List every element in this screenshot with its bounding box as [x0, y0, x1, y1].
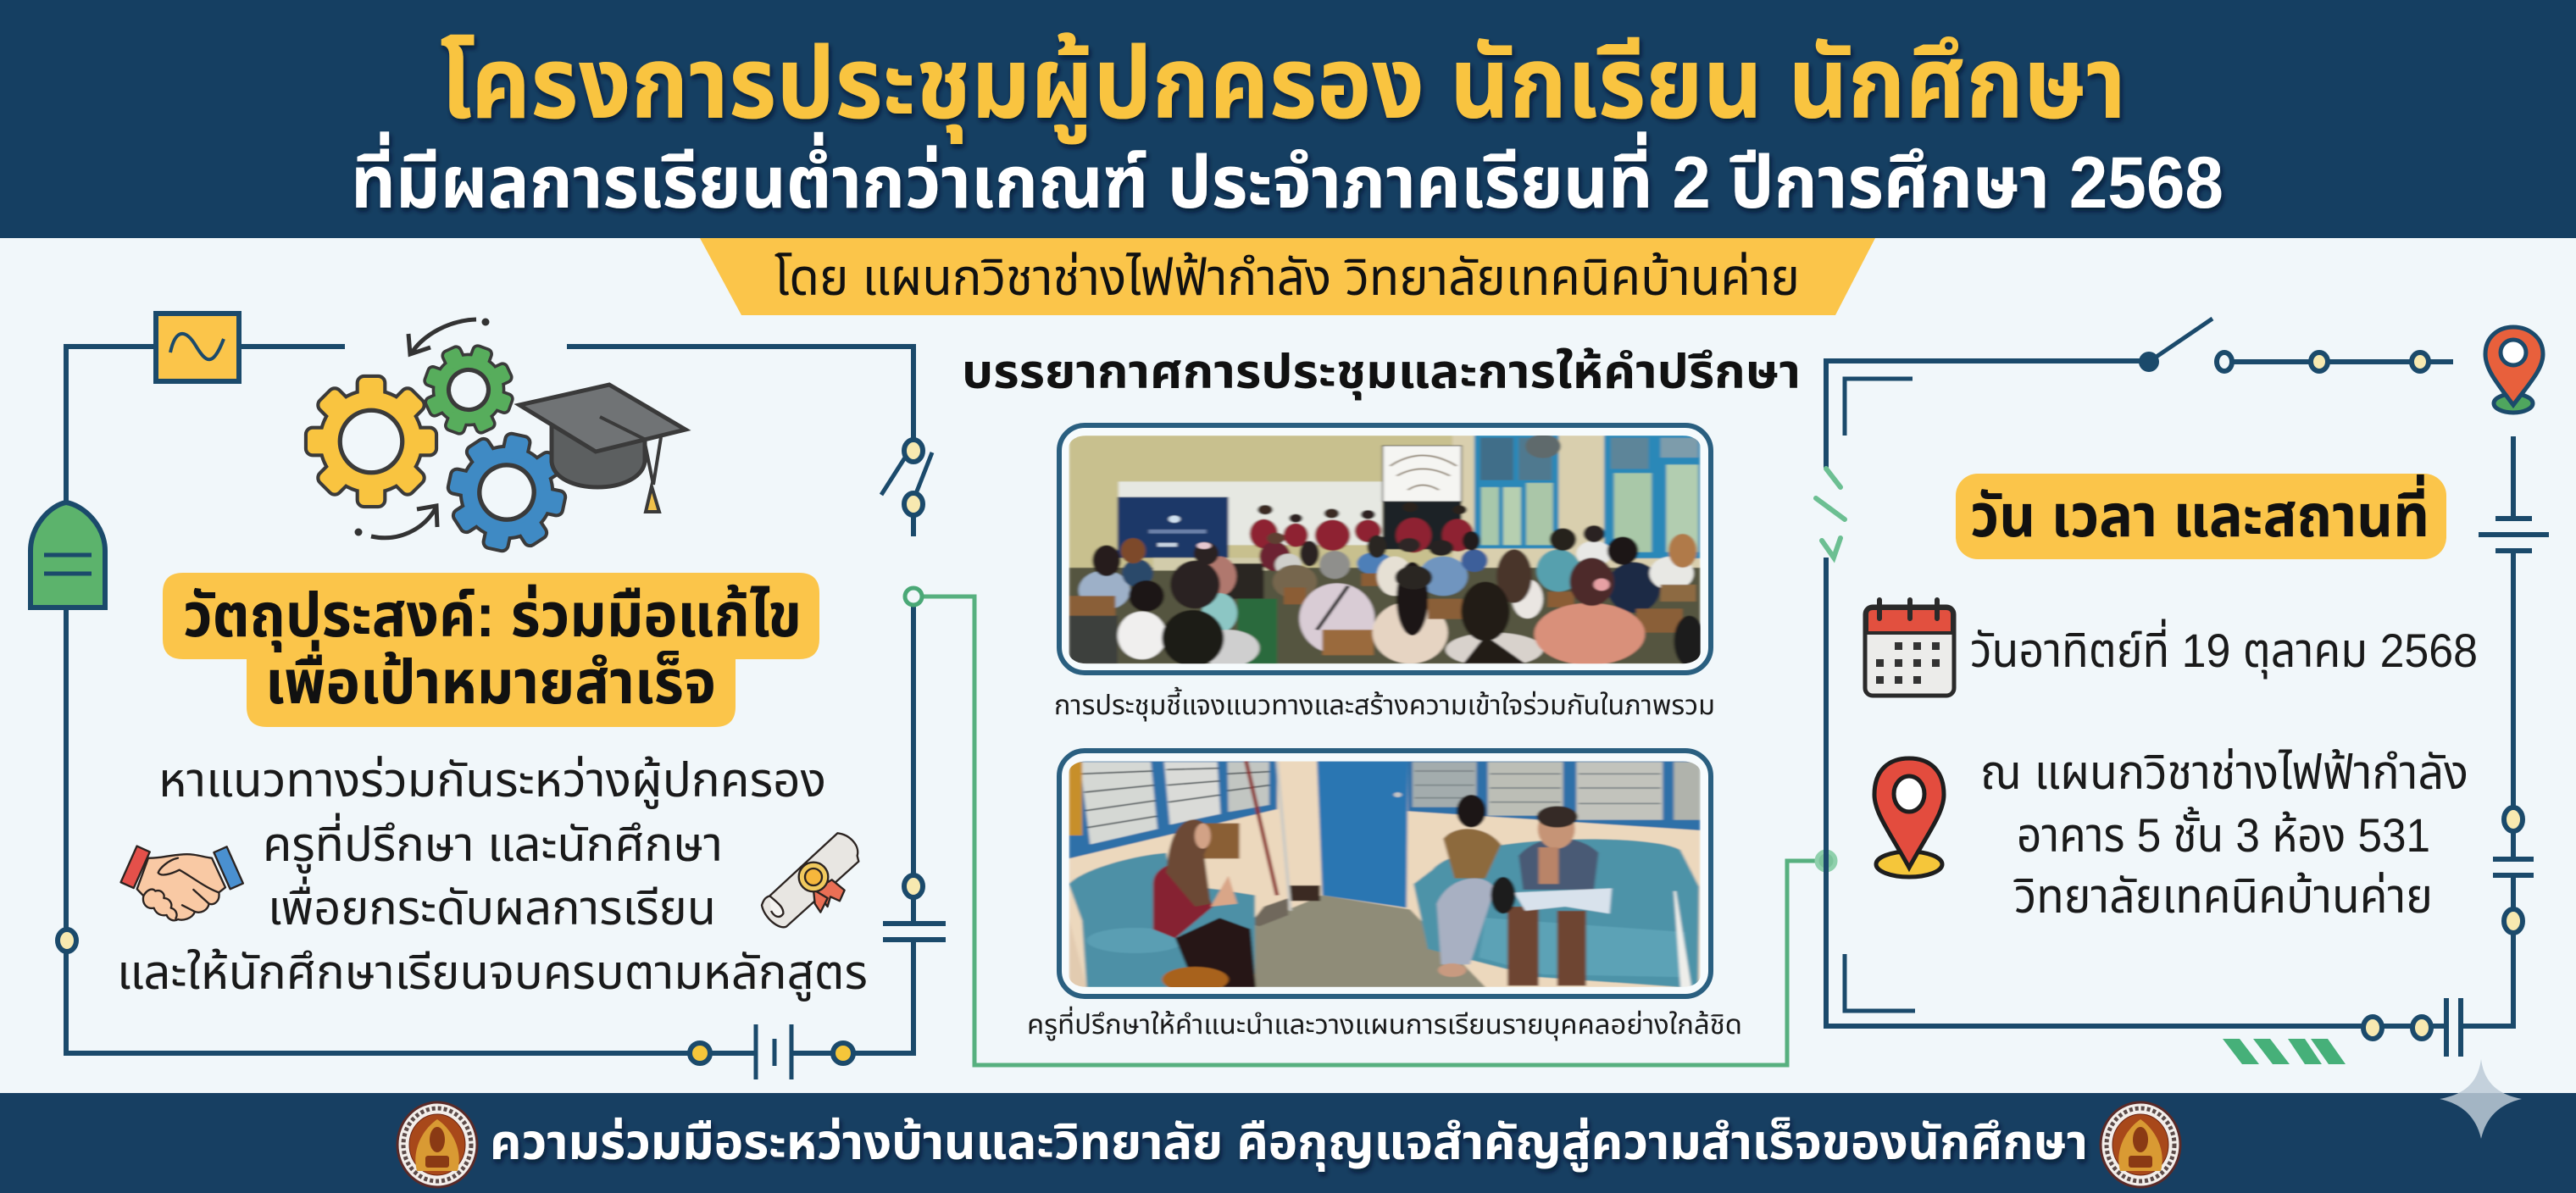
man [1518, 839, 1598, 890]
icon: switch top [2139, 319, 2429, 372]
icon: green gear [414, 335, 524, 445]
objective body text: เพื่อยกระดับผลการเรียน [268, 876, 716, 935]
location text [1980, 746, 2468, 923]
green connector [905, 588, 1835, 1065]
location text: อาคาร 5 ชั้น 3 ห้อง 531 [2017, 806, 2430, 862]
icon: blue gear [440, 425, 574, 559]
icon: green stripes [2223, 1039, 2346, 1064]
left circuit frame [31, 314, 946, 1079]
title [351, 28, 2223, 224]
location text: ณ แผนกวิชาช่างไฟฟ้ากำลัง [1980, 746, 2468, 799]
icon: gears and graduation cap [308, 319, 686, 559]
teacher armchair [1069, 853, 1255, 987]
icon: handshake [121, 846, 243, 920]
objective body text: และให้นักศึกษาเรียนจบครบตามหลักสูตร [117, 946, 868, 1002]
footer band [0, 1093, 2576, 1193]
logo right [2101, 1102, 2180, 1187]
icon: capacitor right [2493, 807, 2534, 933]
right windows [1407, 761, 1701, 830]
title: โครงการประชุมผู้ปกครอง นักเรียน นักศึกษา [440, 28, 2126, 144]
arrow: lower curved [357, 506, 437, 538]
icon: diploma [762, 833, 858, 927]
presenters [1250, 519, 1278, 548]
photo 2: one-on-one counselling [1059, 751, 1711, 996]
location text: วิทยาลัยเทคนิคบ้านค่าย [2013, 869, 2433, 923]
subtitle ribbon [700, 238, 1875, 315]
audience [1069, 616, 1118, 663]
right circuit frame [1816, 319, 2549, 1064]
section heading: meeting atmosphere: บรรยากาศการประชุมและการให้คำปรึกษา [962, 345, 1801, 401]
icon: green slashes [1816, 469, 1845, 558]
objective heading box [163, 573, 819, 727]
photo 1: group meeting [1059, 425, 1711, 673]
objective body text: ครูที่ปรึกษา และนักศึกษา [263, 813, 723, 874]
date text: วันอาทิตย์ที่ 19 ตุลาคม 2568 [1970, 619, 2478, 679]
icon: calendar [1865, 600, 1954, 696]
icon: sparkle [2440, 1059, 2522, 1139]
objective heading box: เพื่อเป้าหมายสำเร็จ [265, 640, 716, 717]
caption 1: การประชุมชี้แจงแนวทางและสร้างความเข้าใจร่วมกันในภาพรวม [1054, 686, 1715, 721]
objective body text [117, 753, 868, 1002]
icon: switch [881, 440, 932, 515]
sofa [1413, 839, 1699, 987]
door [1317, 761, 1407, 907]
icon: capacitor [883, 875, 946, 940]
title: ที่มีผลการเรียนต่ำกว่าเกณฑ์ ประจำภาคเรียนที่ 2 ปีการศึกษา 2568 [351, 131, 2223, 224]
footer slogan: ความร่วมมือระหว่างบ้านและวิทยาลัย คือกุญแจสำคัญสู่ความสำเร็จของนักศึกษา [490, 1115, 2088, 1173]
icon: AC source box [156, 314, 239, 381]
icon: green fuse [31, 502, 105, 608]
woman [1443, 829, 1501, 879]
arrow: upper curved [408, 319, 487, 354]
header band [0, 0, 2576, 238]
objective body text: หาแนวทางร่วมกันระหว่างผู้ปกครอง [158, 753, 826, 809]
icon: large location pin [1874, 758, 1944, 877]
date and place heading: วัน เวลา และสถานที่ [1970, 474, 2429, 549]
icon: graduation cap [519, 385, 686, 512]
teacher [1153, 861, 1213, 938]
icon: yellow gear [308, 378, 435, 505]
icon: bottom capacitor [2363, 998, 2461, 1057]
icon: battery right [2479, 519, 2549, 551]
caption 2: ครูที่ปรึกษาให้คำแนะนำและวางแผนการเรียนรายบุคคลอย่างใกล้ชิด [1027, 1006, 1742, 1041]
left window [1069, 761, 1277, 858]
icon: location pin top [2485, 327, 2543, 413]
objective heading box: วัตถุประสงค์: ร่วมมือแก้ไข [183, 582, 802, 652]
logo left [397, 1102, 477, 1187]
subtitle ribbon: โดย แผนกวิชาช่างไฟฟ้ากำลัง วิทยาลัยเทคนิคบ้านค่าย [774, 249, 1800, 306]
floor [1255, 896, 1485, 987]
icon: battery bottom [690, 1024, 853, 1079]
